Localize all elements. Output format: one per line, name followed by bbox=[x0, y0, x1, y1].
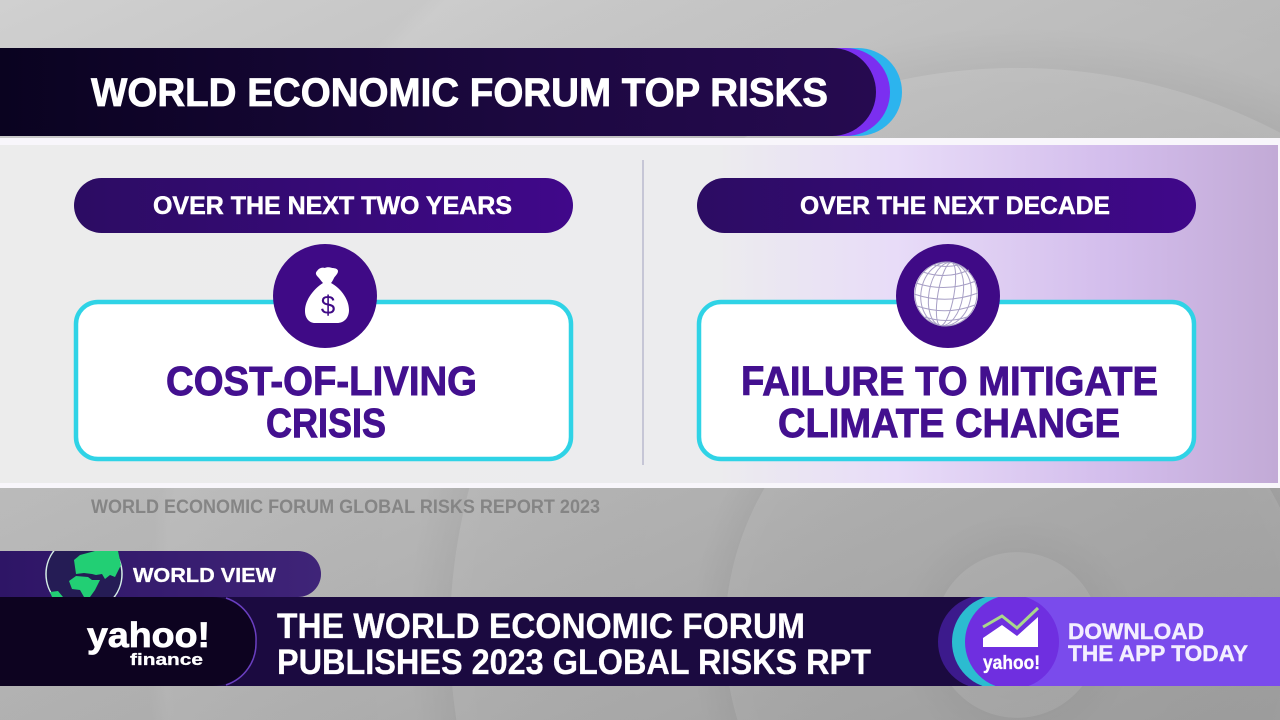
risk card: cost of living bbox=[76, 302, 571, 459]
app promo bbox=[938, 595, 1280, 689]
icon: globe bbox=[896, 244, 1000, 348]
heading: WORLD ECONOMIC FORUM TOP RISKS bbox=[91, 71, 828, 115]
icon: chart logo bbox=[983, 608, 1040, 674]
left column: next two years bbox=[74, 178, 573, 459]
main panel bbox=[0, 138, 1280, 488]
icon: chart logo: yahoo! bbox=[983, 653, 1040, 674]
logo block bbox=[0, 597, 256, 686]
right column: next decade bbox=[697, 178, 1196, 459]
app promo: DOWNLOAD bbox=[1068, 619, 1204, 644]
pill heading: decade bbox=[697, 178, 1196, 233]
yahoo finance logo bbox=[87, 616, 210, 669]
icon: money bag bbox=[273, 244, 377, 348]
pill heading: decade: OVER THE NEXT DECADE bbox=[800, 192, 1110, 220]
divider bbox=[642, 160, 644, 465]
ticker headline: THE WORLD ECONOMIC FORUM bbox=[277, 607, 805, 646]
pill heading: two years bbox=[74, 178, 573, 233]
risk card: cost of living: CRISIS bbox=[266, 400, 386, 446]
ticker headline bbox=[277, 607, 871, 682]
ticker headline: PUBLISHES 2023 GLOBAL RISKS RPT bbox=[277, 643, 871, 682]
app promo: THE APP TODAY bbox=[1068, 641, 1248, 666]
risk card: cost of living: COST-OF-LIVING bbox=[166, 358, 477, 404]
title banner bbox=[0, 48, 902, 136]
lower third bar bbox=[0, 597, 1000, 686]
icon: earth bbox=[45, 551, 123, 597]
risk card: climate: FAILURE TO MITIGATE bbox=[741, 358, 1158, 404]
pill heading: two years: OVER THE NEXT TWO YEARS bbox=[153, 192, 512, 220]
yahoo finance logo: yahoo! bbox=[87, 616, 210, 655]
world view tag bbox=[0, 551, 321, 597]
risk card: climate: CLIMATE CHANGE bbox=[778, 400, 1120, 446]
icon: money bag: $ bbox=[321, 290, 336, 320]
yahoo finance logo: finance bbox=[130, 650, 203, 669]
risk card: climate bbox=[699, 302, 1194, 459]
source caption: WORLD ECONOMIC FORUM GLOBAL RISKS REPORT 2023 bbox=[91, 497, 600, 518]
world view tag: WORLD VIEW bbox=[133, 565, 276, 587]
